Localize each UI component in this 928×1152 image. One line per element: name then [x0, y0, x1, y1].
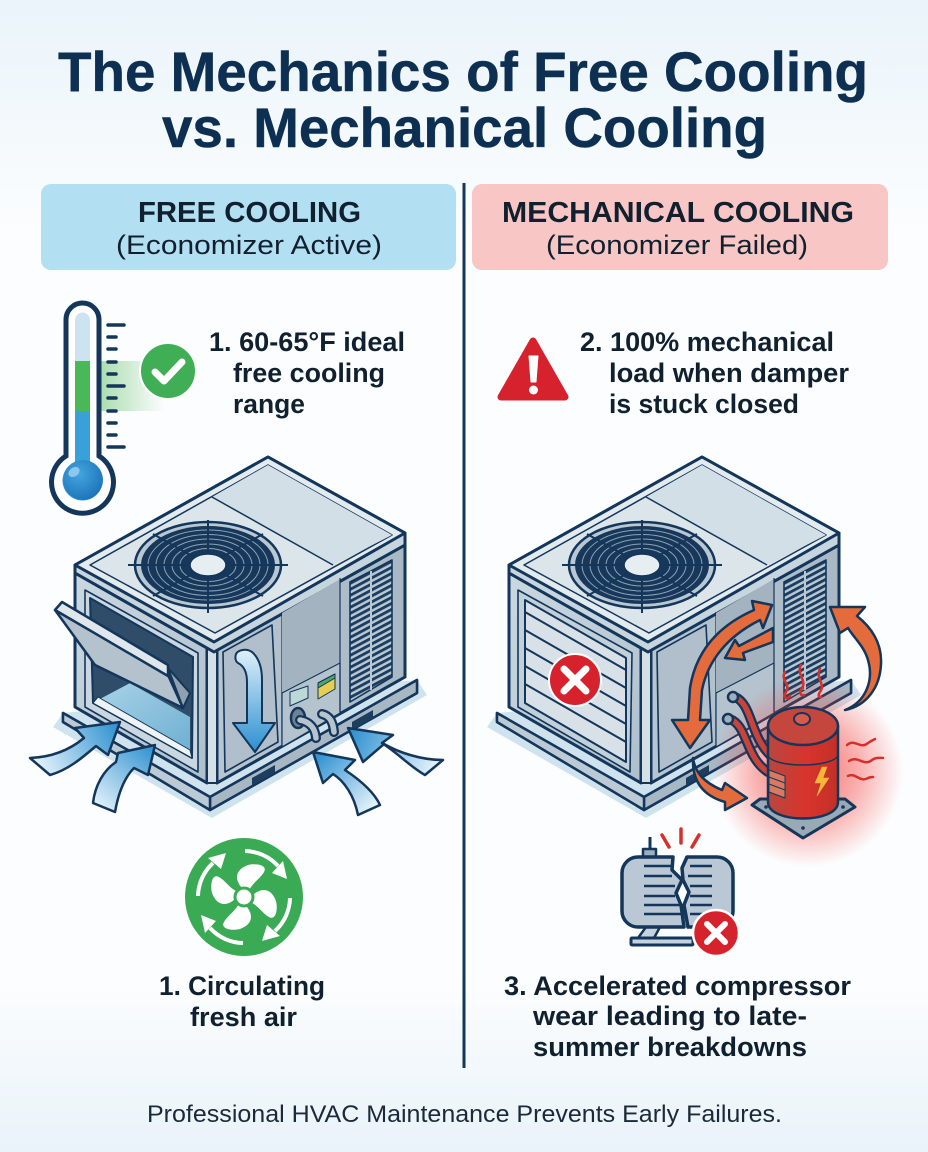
text: mechanical load: is stuck closed — [609, 389, 799, 419]
text: circulating fresh air: fresh air — [190, 1002, 297, 1032]
title: The Mechanics of Free Cooling — [58, 40, 868, 103]
service labels and pipes — [290, 674, 335, 738]
text: mechanical load — [580, 327, 849, 419]
pipes to compressor — [730, 697, 770, 772]
panel: mechanical cooling header: MECHANICAL COOLING — [502, 197, 854, 229]
icon: thermometer with check — [51, 303, 196, 513]
icon: broken motor — [622, 829, 739, 956]
open damper flap — [55, 602, 190, 708]
text: 60-65F range: free cooling — [233, 358, 385, 388]
text: mechanical load: 2. 100% mechanical — [580, 327, 834, 357]
compressor — [752, 707, 855, 838]
text: compressor wear — [504, 971, 851, 1062]
title: vs. Mechanical Cooling — [162, 96, 767, 159]
text: 60-65F range: 1. 60-65°F ideal — [209, 327, 405, 357]
heat squiggles — [784, 665, 883, 779]
footer text: Professional HVAC Maintenance Prevents Early Failures. — [147, 1101, 782, 1128]
arrows: outside air intake — [30, 722, 443, 815]
text: 60-65F range — [209, 327, 405, 419]
text: circulating fresh air: 1. Circulating — [159, 971, 325, 1001]
icon: green recirculating fan — [185, 838, 303, 956]
text: compressor wear: summer breakdowns — [533, 1032, 807, 1062]
arrow: internal airflow down — [233, 650, 275, 752]
text: compressor wear: wear leading to late- — [532, 1001, 807, 1031]
panel: free cooling header: (Economizer Active) — [116, 230, 382, 260]
text: mechanical load: load when damper — [609, 358, 849, 388]
compressor overheating glow — [713, 677, 903, 867]
title — [58, 40, 868, 159]
panel: mechanical cooling header — [472, 184, 888, 270]
damper opening — [85, 590, 198, 772]
icon: failed damper X — [549, 654, 601, 706]
text: circulating fresh air — [159, 971, 325, 1032]
panel: mechanical cooling header: (Economizer Failed) — [546, 230, 808, 260]
text: compressor wear: 3. Accelerated compressor — [504, 971, 851, 1001]
text: 60-65F range: range — [233, 389, 305, 419]
panel: free cooling header: FREE COOLING — [138, 197, 361, 229]
closed louvered damper — [518, 590, 632, 772]
illustration: rooftop unit, economizer open — [30, 457, 443, 818]
panel: free cooling header — [41, 184, 456, 270]
arrows: recirculating heat — [672, 601, 881, 810]
icon: warning triangle — [501, 341, 565, 397]
illustration: rooftop unit, economizer failed — [487, 457, 903, 867]
